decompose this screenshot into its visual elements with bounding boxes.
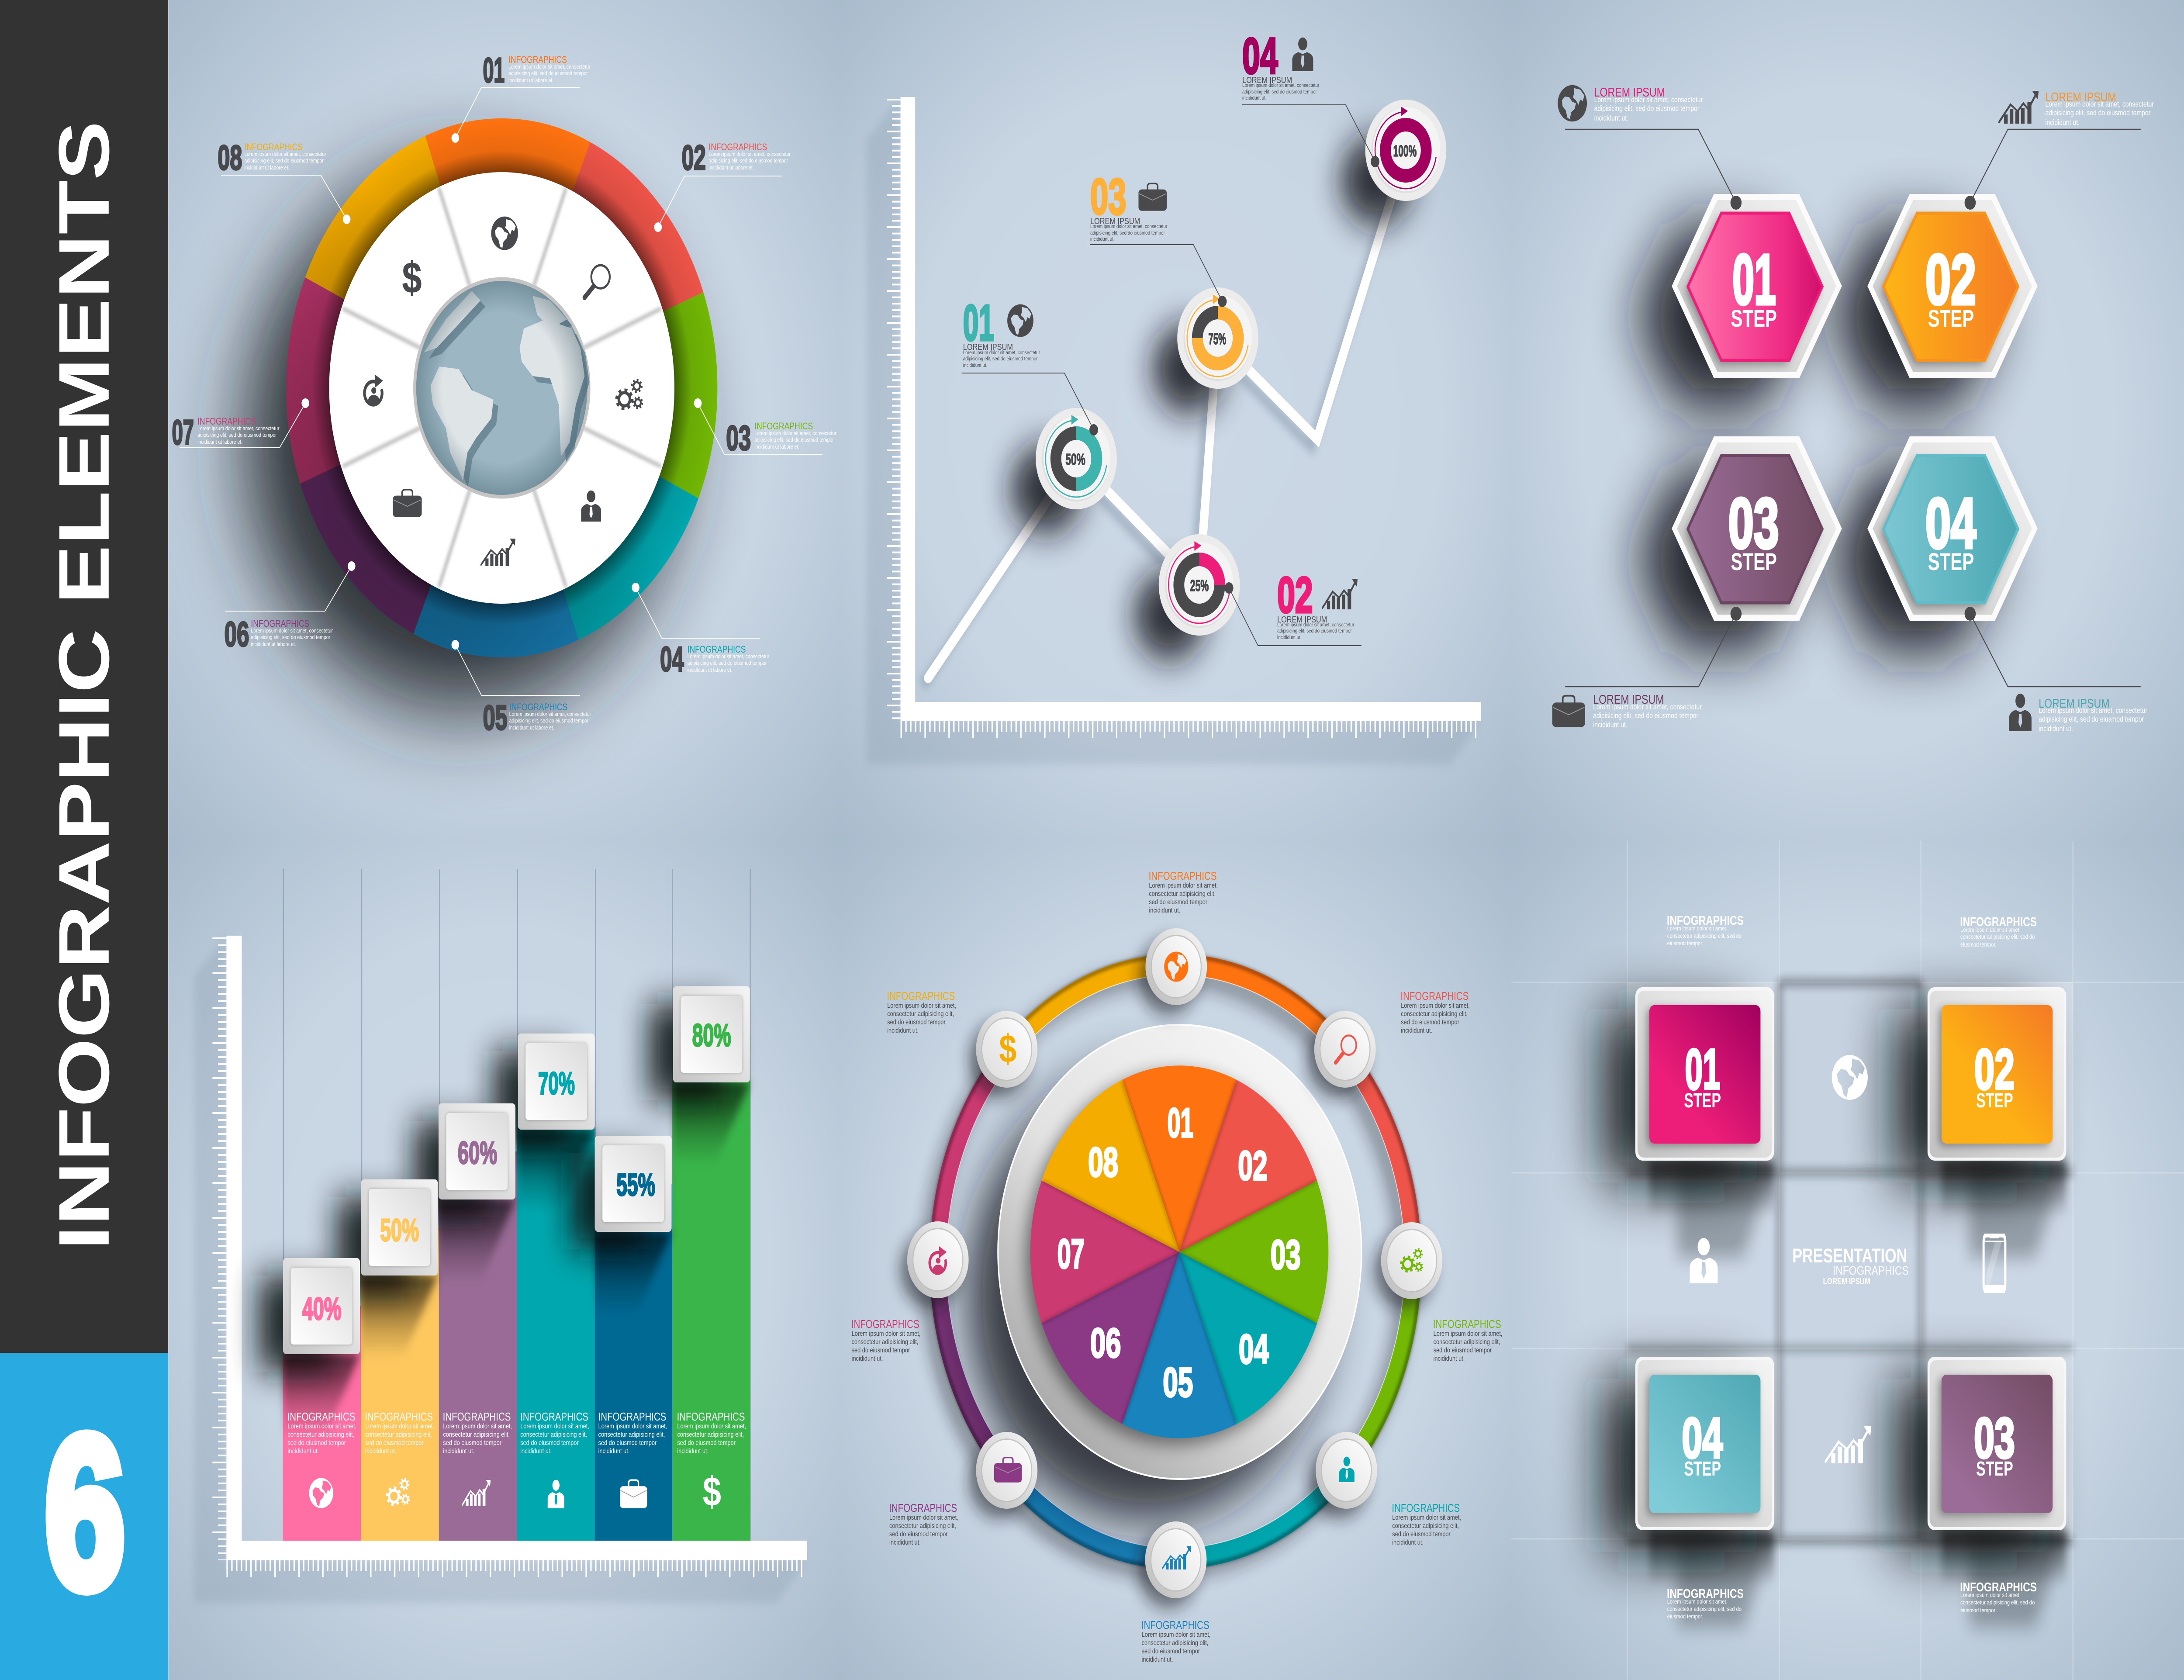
- label top: [1149, 870, 1218, 914]
- label top left: consectetur adipisicing elit, sed do: [1667, 933, 1742, 939]
- label 01: 01: [963, 295, 994, 351]
- globe: [415, 279, 590, 497]
- label 03: LOREM IPSUM: [1593, 692, 1664, 707]
- bar text 3: [443, 1410, 512, 1455]
- bar text 5: incididunt ut.: [598, 1448, 629, 1455]
- label 05: INFOGRAPHICS: [509, 702, 567, 713]
- label right: consectetur adipisicing elit,: [1434, 1338, 1500, 1346]
- bar text 4: [520, 1410, 589, 1455]
- percent labels: 70%: [538, 1066, 575, 1101]
- pie numbers: 04: [1239, 1326, 1269, 1372]
- bar text 4: sed do eiusmod tempor: [520, 1439, 579, 1447]
- label top right: consectetur adipisicing elit, sed do: [1960, 933, 2035, 940]
- node icons: $: [999, 1027, 1016, 1071]
- bar icons: [309, 1469, 721, 1515]
- circle 50%: 50%: [1065, 450, 1085, 468]
- hexagon step 02: 02: [1925, 240, 1976, 319]
- wedge icons: $: [402, 254, 422, 302]
- circle 75%: 75%: [1208, 330, 1226, 348]
- bar text 2: [365, 1410, 434, 1455]
- percent labels: 55%: [616, 1167, 655, 1202]
- label 04: incididunt ut labore et.: [688, 667, 733, 673]
- label 04: LOREM IPSUM: [1242, 75, 1292, 85]
- bar text 3: Lorem ipsum dolor sit amet,: [443, 1423, 512, 1430]
- label 03: 03: [726, 418, 751, 458]
- white inner disc: [329, 172, 674, 604]
- hexagon step 01: [1672, 194, 1842, 378]
- panel: hexagon steps: [1511, 0, 2184, 841]
- ring shadow: [930, 975, 1405, 1569]
- label 04: Lorem ipsum dolor sit amet, consectetur: [1242, 83, 1320, 88]
- bar text 1: INFOGRAPHICS: [287, 1410, 355, 1423]
- bar text 6: [677, 1410, 746, 1455]
- label 02: 02: [1277, 567, 1313, 623]
- label 03: INFOGRAPHICS: [754, 421, 813, 432]
- centre title: LOREM IPSUM: [1823, 1276, 1870, 1286]
- circle 100%: [1341, 100, 1446, 225]
- label 02: incididunt ut.: [1277, 635, 1302, 640]
- hexagon step 02: STEP: [1928, 304, 1974, 332]
- label 03: [1552, 692, 1702, 729]
- label bottom left: consectetur adipisicing elit,: [889, 1522, 956, 1530]
- bar text 3: consectetur adipisicing elit,: [443, 1431, 510, 1438]
- sidebar number: 6: [45, 1391, 125, 1633]
- label 04: LOREM IPSUM: [2039, 696, 2110, 711]
- tile 04: [1602, 1357, 1774, 1628]
- tile numbers: [1682, 1038, 2015, 1480]
- label top right: Lorem ipsum dolor sit amet,: [1401, 1002, 1470, 1009]
- circle 75%: [1152, 287, 1258, 413]
- label bottom right: [1392, 1502, 1461, 1546]
- bar text 5: Lorem ipsum dolor sit amet,: [598, 1423, 667, 1430]
- sidebar title: INFOGRAPHIC ELEMENTS: [44, 121, 124, 1250]
- label 07: INFOGRAPHICS: [197, 416, 256, 427]
- tile 02: [1894, 987, 2066, 1258]
- bar text 4: Lorem ipsum dolor sit amet,: [520, 1423, 589, 1430]
- bar text 3: incididunt ut.: [443, 1448, 474, 1455]
- label top: INFOGRAPHICS: [1149, 870, 1216, 882]
- label left: INFOGRAPHICS: [851, 1318, 919, 1331]
- percent labels: 50%: [380, 1213, 419, 1248]
- bar text 1: [287, 1410, 356, 1455]
- label 01: INFOGRAPHICS: [508, 55, 567, 66]
- label top left: [887, 990, 956, 1034]
- tile 50%: [361, 1179, 438, 1276]
- pie numbers: 05: [1163, 1359, 1193, 1406]
- label 02: 02: [682, 138, 706, 177]
- label right: INFOGRAPHICS: [1433, 1318, 1501, 1331]
- label 05: [483, 698, 591, 737]
- bar text 4: INFOGRAPHICS: [520, 1410, 588, 1423]
- label bottom right: consectetur adipisicing elit,: [1392, 1522, 1459, 1530]
- label bottom right: INFOGRAPHICS: [1960, 1580, 2037, 1594]
- label 03: incididunt ut.: [1593, 721, 1628, 729]
- tile 80%: [673, 986, 750, 1082]
- sidebar: [0, 0, 168, 1680]
- label bottom: INFOGRAPHICS: [1141, 1619, 1209, 1632]
- label bottom left: INFOGRAPHICS: [889, 1502, 957, 1514]
- label top: consectetur adipisicing elit,: [1149, 890, 1216, 898]
- label left: consectetur adipisicing elit,: [852, 1338, 918, 1346]
- label 04: [660, 640, 769, 679]
- label 02: adipisicing elit, sed do eiusmod tempor: [1277, 628, 1352, 634]
- label 04: [1242, 28, 1320, 101]
- label bottom: incididunt ut.: [1142, 1656, 1173, 1663]
- label bottom: sed do eiusmod tempor: [1142, 1648, 1200, 1655]
- label 01: Lorem ipsum dolor sit amet, consectetur: [963, 350, 1040, 356]
- label top left: sed do eiusmod tempor: [887, 1019, 946, 1026]
- tile 55%: [595, 1136, 672, 1232]
- tile 60%: [439, 1103, 515, 1200]
- wedge creases: [342, 188, 661, 587]
- label bottom left: [889, 1502, 958, 1546]
- label 08: Lorem ipsum dolor sit amet, consectetur: [244, 151, 326, 157]
- label bottom right: Lorem ipsum dolor sit amet,: [1960, 1592, 2021, 1598]
- grid icons: [1690, 1055, 2005, 1463]
- label top right: INFOGRAPHICS: [1400, 990, 1469, 1002]
- panel: line graph: [840, 0, 1511, 841]
- label 01: adipisicing elit, sed do eiusmod tempor: [508, 70, 588, 76]
- label 01: incididunt ut.: [1594, 114, 1628, 122]
- label 04: INFOGRAPHICS: [688, 644, 746, 655]
- label 03: Lorem ipsum dolor sit amet, consectetur: [1090, 224, 1168, 229]
- label 02: [1277, 567, 1358, 640]
- pie creases: [1043, 1082, 1316, 1422]
- label top: Lorem ipsum dolor sit amet,: [1149, 882, 1218, 889]
- hexagon step 02: [1867, 194, 2038, 378]
- label 01: LOREM IPSUM: [963, 342, 1013, 352]
- label bottom left: eiusmod tempor.: [1667, 1613, 1703, 1620]
- tile numbers: STEP: [1976, 1457, 2013, 1480]
- tile 01: [1602, 987, 1774, 1258]
- label top left: incididunt ut.: [887, 1027, 919, 1034]
- circle 50%: [1011, 408, 1117, 534]
- tile shadows: [259, 1004, 750, 1437]
- label 03: adipisicing elit, sed do eiusmod tempor: [754, 436, 834, 443]
- column guide lines: [283, 869, 750, 1542]
- pie numbers: 03: [1271, 1232, 1301, 1278]
- hexagon step 01: STEP: [1731, 304, 1777, 332]
- tile numbers: 03: [1974, 1407, 2015, 1470]
- bar text 5: [598, 1410, 667, 1455]
- label 08: incididunt ut labore et.: [244, 164, 289, 171]
- label 04: adipisicing elit, sed do eiusmod tempor: [2039, 716, 2144, 723]
- panel: segmented wheel: [169, 0, 841, 841]
- label 04: 04: [1242, 28, 1278, 84]
- bar text 1: Lorem ipsum dolor sit amet,: [287, 1423, 356, 1430]
- node icons: [927, 951, 1423, 1569]
- label 03: incididunt ut labore et.: [754, 443, 799, 450]
- percent labels: [302, 1018, 731, 1326]
- label top right: Lorem ipsum dolor sit amet,: [1960, 926, 2021, 933]
- label 02: LOREM IPSUM: [2045, 90, 2116, 104]
- label bottom left: Lorem ipsum dolor sit amet,: [889, 1514, 958, 1521]
- bar text 6: incididunt ut.: [677, 1448, 708, 1455]
- bar text 4: incididunt ut.: [520, 1448, 552, 1455]
- label 01: 01: [483, 51, 505, 90]
- wheel: eight coloured ring segments: [245, 67, 758, 709]
- label top left: eiusmod tempor.: [1667, 940, 1703, 947]
- label 08: 08: [218, 138, 242, 177]
- label bottom right: INFOGRAPHICS: [1392, 1502, 1460, 1514]
- wheel drop shadow: [244, 171, 675, 710]
- label 07: Lorem ipsum dolor sit amet, consectetur: [197, 425, 280, 432]
- label right: incididunt ut.: [1434, 1355, 1465, 1362]
- hexagon step 01: 01: [1732, 240, 1776, 319]
- pie numbers: [1057, 1100, 1301, 1406]
- tile 03: [1894, 1357, 2066, 1628]
- label 01: [963, 295, 1040, 368]
- label top right: [1400, 990, 1470, 1034]
- label 01: LOREM IPSUM: [1594, 85, 1665, 100]
- hexagon step 04: 04: [1925, 484, 1976, 563]
- panel: pie and ring: [840, 841, 1512, 1680]
- central disc: [968, 1025, 1362, 1521]
- label top right: eiusmod tempor.: [1960, 941, 1997, 948]
- percent labels: 40%: [302, 1291, 342, 1326]
- pie numbers: 02: [1238, 1143, 1268, 1189]
- tile 40%: [283, 1258, 360, 1354]
- label right: Lorem ipsum dolor sit amet,: [1434, 1330, 1502, 1338]
- label 04: adipisicing elit, sed do eiusmod tempor: [1242, 89, 1317, 95]
- axes: [894, 97, 1481, 729]
- label bottom right: sed do eiusmod tempor: [1392, 1531, 1451, 1538]
- label 05: Lorem ipsum dolor sit amet, consectetur: [509, 711, 591, 717]
- circle 25%: 25%: [1190, 577, 1209, 595]
- label 07: 07: [172, 413, 194, 452]
- bar text 5: consectetur adipisicing elit,: [598, 1431, 665, 1438]
- tile numbers: 04: [1682, 1407, 1723, 1470]
- label 02: Lorem ipsum dolor sit amet, consectetur: [1277, 622, 1355, 628]
- label 02: incididunt ut labore et.: [708, 164, 754, 171]
- circle 100%: 100%: [1393, 142, 1417, 160]
- bar text 6: Lorem ipsum dolor sit amet,: [677, 1423, 746, 1430]
- bar text 3: INFOGRAPHICS: [443, 1410, 511, 1423]
- label 02: INFOGRAPHICS: [708, 142, 767, 153]
- label 07: incididunt ut labore et.: [197, 439, 242, 445]
- label bottom: Lorem ipsum dolor sit amet,: [1142, 1631, 1210, 1639]
- label 07: adipisicing elit, sed do eiusmod tempor: [197, 432, 277, 438]
- callout lines and dots: [180, 87, 822, 695]
- axes: [219, 936, 807, 1569]
- grid lines: [1511, 841, 2184, 1680]
- hexagon step 04: STEP: [1928, 548, 1974, 575]
- hexagon shadows: [1635, 225, 2001, 651]
- tile numbers: STEP: [1976, 1089, 2013, 1112]
- label 08: INFOGRAPHICS: [244, 142, 303, 153]
- label 04: adipisicing elit, sed do eiusmod tempor: [688, 660, 767, 666]
- grid groove shadows: [1628, 979, 2073, 1545]
- label 03: [1090, 169, 1168, 242]
- label 05: adipisicing elit, sed do eiusmod tempor: [509, 717, 588, 724]
- label 02: adipisicing elit, sed do eiusmod tempor: [2045, 109, 2151, 117]
- pie: [1082, 1130, 1277, 1374]
- pie numbers: 07: [1057, 1231, 1084, 1277]
- label left: Lorem ipsum dolor sit amet,: [852, 1330, 920, 1338]
- hexagon step 03: 03: [1728, 484, 1779, 563]
- label 02: adipisicing elit, sed do eiusmod tempor: [708, 157, 788, 164]
- bar text 2: incididunt ut.: [365, 1448, 397, 1455]
- pie numbers: 08: [1088, 1139, 1118, 1186]
- axis shadow: [194, 936, 807, 1603]
- label 08: [218, 138, 326, 177]
- label top left: INFOGRAPHICS: [887, 990, 955, 1002]
- label 06: adipisicing elit, sed do eiusmod tempor: [251, 634, 330, 640]
- label 05: incididunt ut labore et.: [509, 724, 554, 731]
- label 06: Lorem ipsum dolor sit amet, consectetur: [251, 627, 333, 634]
- trend line: [923, 150, 1406, 686]
- label bottom right: eiusmod tempor.: [1960, 1607, 1997, 1614]
- callout lines and dots: [962, 105, 1379, 646]
- label top: incididunt ut.: [1149, 907, 1180, 914]
- tile numbers: 02: [1974, 1038, 2015, 1102]
- bar text 2: Lorem ipsum dolor sit amet,: [365, 1423, 434, 1430]
- label 06: [225, 615, 333, 654]
- label 04: incididunt ut.: [1242, 95, 1267, 101]
- tile numbers: STEP: [1684, 1089, 1721, 1112]
- tile numbers: 01: [1685, 1038, 1720, 1102]
- label left: incididunt ut.: [852, 1355, 883, 1362]
- bars: [283, 1034, 750, 1542]
- label top: sed do eiusmod tempor: [1149, 899, 1207, 906]
- label bottom right: consectetur adipisicing elit, sed do: [1960, 1599, 2035, 1606]
- label left: sed do eiusmod tempor: [852, 1347, 910, 1354]
- label 01: Lorem ipsum dolor sit amet, consectetur: [508, 63, 591, 70]
- label 02: LOREM IPSUM: [1277, 614, 1327, 624]
- label 03: Lorem ipsum dolor sit amet, consectetur: [754, 430, 836, 436]
- grid cells: [1628, 982, 2073, 1539]
- tile numbers: STEP: [1684, 1457, 1721, 1480]
- hexagon step 03: [1672, 436, 1842, 621]
- label 02: Lorem ipsum dolor sit amet, consectetur: [708, 151, 791, 157]
- bar text 1: incididunt ut.: [287, 1448, 319, 1455]
- centre title: INFOGRAPHICS: [1833, 1264, 1909, 1278]
- panel: square grid steps: [1511, 841, 2184, 1680]
- tile 70%: [518, 1034, 595, 1130]
- label 01: [1558, 85, 1703, 122]
- label top left: Lorem ipsum dolor sit amet,: [887, 1002, 956, 1009]
- hexagon step 03: STEP: [1731, 548, 1777, 575]
- label 03: Lorem ipsum dolor sit amet, consectetur: [1593, 703, 1702, 711]
- panel: bar chart: [169, 841, 841, 1680]
- centre title: PRESENTATION: [1792, 1244, 1907, 1267]
- label top right: [1960, 914, 2037, 948]
- label 08: adipisicing elit, sed do eiusmod tempor: [244, 157, 324, 164]
- bar text 4: consectetur adipisicing elit,: [520, 1431, 587, 1438]
- label 03: [726, 418, 836, 458]
- label 03: incididunt ut.: [1090, 236, 1115, 242]
- label top right: INFOGRAPHICS: [1960, 914, 2037, 929]
- label bottom left: Lorem ipsum dolor sit amet,: [1667, 1598, 1728, 1605]
- label 02: [1998, 90, 2154, 127]
- label 01: incididunt ut labore et.: [508, 77, 553, 83]
- label 07: [172, 413, 280, 452]
- label 04: incididunt ut.: [2039, 725, 2073, 733]
- label 02: incididunt ut.: [2045, 119, 2080, 127]
- hexagon step 04: [1867, 436, 2038, 621]
- label 04: 04: [660, 640, 684, 679]
- bar text 3: sed do eiusmod tempor: [443, 1439, 501, 1447]
- label 01: [483, 51, 591, 90]
- pie numbers: 01: [1168, 1100, 1193, 1146]
- pie numbers: 06: [1090, 1320, 1121, 1366]
- bar text 6: INFOGRAPHICS: [677, 1410, 745, 1423]
- label bottom left: incididunt ut.: [889, 1539, 921, 1546]
- label 06: INFOGRAPHICS: [251, 619, 309, 629]
- label bottom left: sed do eiusmod tempor: [889, 1531, 948, 1538]
- wedge icons: [362, 217, 642, 566]
- label top left: consectetur adipisicing elit,: [887, 1010, 954, 1018]
- label 01: incididunt ut.: [963, 363, 987, 368]
- bar text 2: sed do eiusmod tempor: [365, 1439, 424, 1447]
- label bottom: consectetur adipisicing elit,: [1142, 1639, 1208, 1647]
- bar text 2: INFOGRAPHICS: [365, 1410, 433, 1423]
- label 06: 06: [225, 615, 249, 654]
- label right: [1433, 1318, 1502, 1362]
- label bottom right: Lorem ipsum dolor sit amet,: [1392, 1514, 1461, 1521]
- label 01: adipisicing elit, sed do eiusmod tempor: [1594, 105, 1700, 113]
- label top right: consectetur adipisicing elit,: [1401, 1010, 1468, 1018]
- axis shadow: [867, 97, 1481, 764]
- label 01: adipisicing elit, sed do eiusmod tempor: [963, 356, 1038, 362]
- label 04: [2009, 694, 2148, 733]
- callout lines and dots: [1565, 129, 2141, 687]
- label 03: adipisicing elit, sed do eiusmod tempor: [1593, 712, 1699, 720]
- label 04: Lorem ipsum dolor sit amet, consectetur: [688, 653, 769, 660]
- label 03: 03: [1090, 169, 1126, 225]
- label right: sed do eiusmod tempor: [1434, 1347, 1492, 1354]
- bar text 6: consectetur adipisicing elit,: [677, 1431, 744, 1438]
- label bottom left: INFOGRAPHICS: [1667, 1586, 1744, 1601]
- label 02: [682, 138, 791, 177]
- label 01: Lorem ipsum dolor sit amet, consectetur: [1594, 96, 1703, 104]
- label bottom left: consectetur adipisicing elit, sed do: [1667, 1606, 1742, 1612]
- label top right: incididunt ut.: [1401, 1027, 1432, 1034]
- percent labels: 60%: [458, 1135, 497, 1170]
- circle 25%: [1134, 534, 1240, 660]
- label top left: Lorem ipsum dolor sit amet,: [1667, 925, 1728, 932]
- label top left: INFOGRAPHICS: [1667, 913, 1744, 928]
- bar text 5: sed do eiusmod tempor: [598, 1439, 657, 1447]
- label left: [851, 1318, 920, 1362]
- segmented ring: [840, 841, 1512, 1680]
- percent labels: 80%: [692, 1018, 731, 1053]
- label bottom right: incididunt ut.: [1392, 1539, 1424, 1546]
- label 06: incididunt ut labore et.: [251, 641, 296, 647]
- label 03: adipisicing elit, sed do eiusmod tempor: [1090, 230, 1165, 236]
- centre title: [1792, 1244, 1909, 1286]
- ring nodes: [900, 928, 1442, 1608]
- label bottom: [1141, 1619, 1210, 1663]
- label bottom left: [1667, 1586, 1744, 1620]
- label 02: Lorem ipsum dolor sit amet, consectetur: [2045, 100, 2154, 108]
- label top left: [1667, 913, 1744, 947]
- bar text 2: consectetur adipisicing elit,: [365, 1431, 432, 1438]
- label bottom right: [1960, 1580, 2037, 1614]
- label 03: LOREM IPSUM: [1090, 216, 1140, 226]
- bar text 1: consectetur adipisicing elit,: [287, 1431, 354, 1438]
- label 05: 05: [483, 698, 508, 737]
- bar icons: $: [703, 1469, 721, 1515]
- label top right: sed do eiusmod tempor: [1401, 1019, 1459, 1026]
- label 04: Lorem ipsum dolor sit amet, consectetur: [2039, 707, 2148, 715]
- bar text 1: sed do eiusmod tempor: [287, 1439, 346, 1447]
- bar text 6: sed do eiusmod tempor: [677, 1439, 736, 1447]
- bar text 5: INFOGRAPHICS: [598, 1410, 666, 1423]
